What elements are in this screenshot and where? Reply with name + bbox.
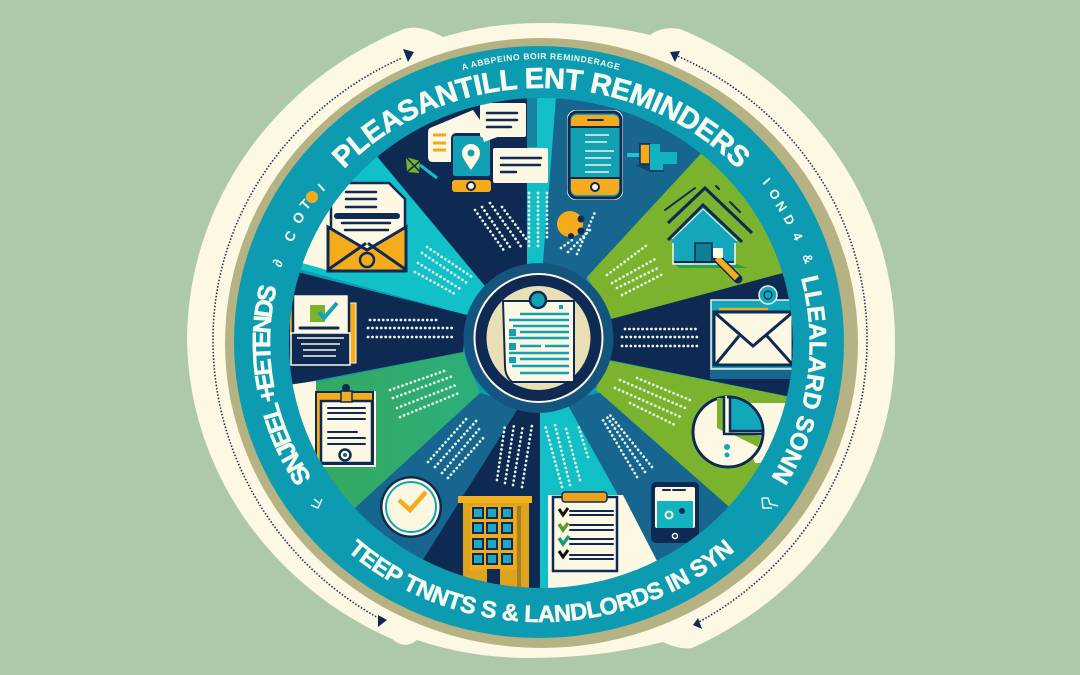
central hub xyxy=(464,263,614,413)
text dots: top navy xyxy=(475,203,527,252)
small upper-left letters with coin: I xyxy=(315,181,328,194)
text dots: emerald xyxy=(390,370,459,417)
khaki ring xyxy=(225,38,858,648)
text dots: top cyan xyxy=(529,193,547,250)
segment: lime lower right xyxy=(596,360,787,506)
text dots: upper-left cyan xyxy=(415,247,472,295)
text dots: left navy xyxy=(368,320,453,337)
segment: cream bottom xyxy=(548,495,657,588)
icon: folder with approved document xyxy=(290,294,356,365)
small upper-left letters with coin xyxy=(269,181,328,269)
text dots: lower-right lime xyxy=(615,378,690,425)
cream patch left of envelope xyxy=(302,200,336,270)
icon: coin with dots xyxy=(557,211,584,239)
text dots: upper-right lime xyxy=(607,245,665,295)
small upper-right letters: O xyxy=(766,186,784,203)
small glyph lower left xyxy=(311,499,322,508)
text dots: lower-right blue xyxy=(603,415,652,477)
segment: cyan bottom xyxy=(540,406,652,588)
segment: lime upper right xyxy=(587,154,782,319)
icon: pie chart xyxy=(693,396,787,467)
text dots: upper-right blue xyxy=(561,212,595,254)
text dots: right navy xyxy=(622,329,698,346)
icon: clock with check xyxy=(380,476,442,538)
small curved subtitle: A ABBPEINO BOIR REMINDERAGE xyxy=(462,53,620,70)
segment: navy bottom xyxy=(423,410,540,588)
icon: envelope right xyxy=(710,286,794,379)
small upper-left letters with coin: O xyxy=(289,208,308,227)
segment: cyan upper left xyxy=(300,157,484,315)
small upper-right letters: I xyxy=(760,175,773,188)
icon: apartment building xyxy=(458,496,532,591)
small upper-left letters with coin: T xyxy=(296,196,314,213)
cream patch left of clipboard xyxy=(292,381,316,453)
icon: location phone and chat bubbles xyxy=(428,103,548,194)
wheel of segments xyxy=(289,98,793,588)
dotted arrow: right arc xyxy=(670,51,867,629)
icon: phone lower right xyxy=(651,482,699,543)
document in hub xyxy=(503,292,574,382)
small upper-right letters: & xyxy=(799,252,817,266)
text dots: lower-left blue xyxy=(428,417,484,478)
icon: house with pencil xyxy=(665,186,752,279)
segment: navy right xyxy=(610,273,793,396)
teal text band xyxy=(234,46,844,638)
small upper-left letters with coin: C xyxy=(281,228,299,244)
right curved text: LLEALARD SONN xyxy=(772,275,827,486)
small upper-right letters: D xyxy=(780,212,798,228)
small glyph lower right xyxy=(762,498,778,508)
segment: blue lower right xyxy=(568,393,728,562)
bottom curved text: TEEP TNNTS S & LANDLORDS IN SYN xyxy=(351,538,734,622)
left curved text: SNJEEL +EETENDS xyxy=(252,285,310,485)
segment: emerald left xyxy=(293,352,480,508)
icon: checklist notepad xyxy=(553,492,617,571)
cream outer badge xyxy=(187,23,895,658)
blue strip behind chat xyxy=(527,95,537,147)
segment: blue lower left xyxy=(355,393,517,560)
upper chat bubble xyxy=(480,103,526,137)
icon: envelope with letter xyxy=(328,183,406,271)
small upper-left letters with coin: ∂ xyxy=(269,257,286,269)
text dots: bottom navy xyxy=(497,425,532,487)
icon: green kite xyxy=(406,157,437,178)
small upper-right letters xyxy=(760,175,817,266)
title curved text: PLEASANTILL ENT REMINDERS xyxy=(331,68,750,168)
segment: navy left xyxy=(289,272,467,385)
note with orange lines xyxy=(428,110,487,162)
icon: clipboard contract xyxy=(315,384,375,466)
small upper-right letters: 4 xyxy=(789,230,806,244)
text dots: bottom cyan xyxy=(545,425,588,487)
segment: navy top xyxy=(377,98,527,286)
small upper-right letters: N xyxy=(773,198,790,214)
icon: smartphone with connector xyxy=(567,110,677,200)
segment: cyan top xyxy=(527,98,556,264)
segment: blue upper right xyxy=(542,98,701,280)
phone with map pin xyxy=(451,133,492,194)
dotted arrow: left arc xyxy=(213,49,414,627)
lower chat bubble xyxy=(493,148,548,183)
